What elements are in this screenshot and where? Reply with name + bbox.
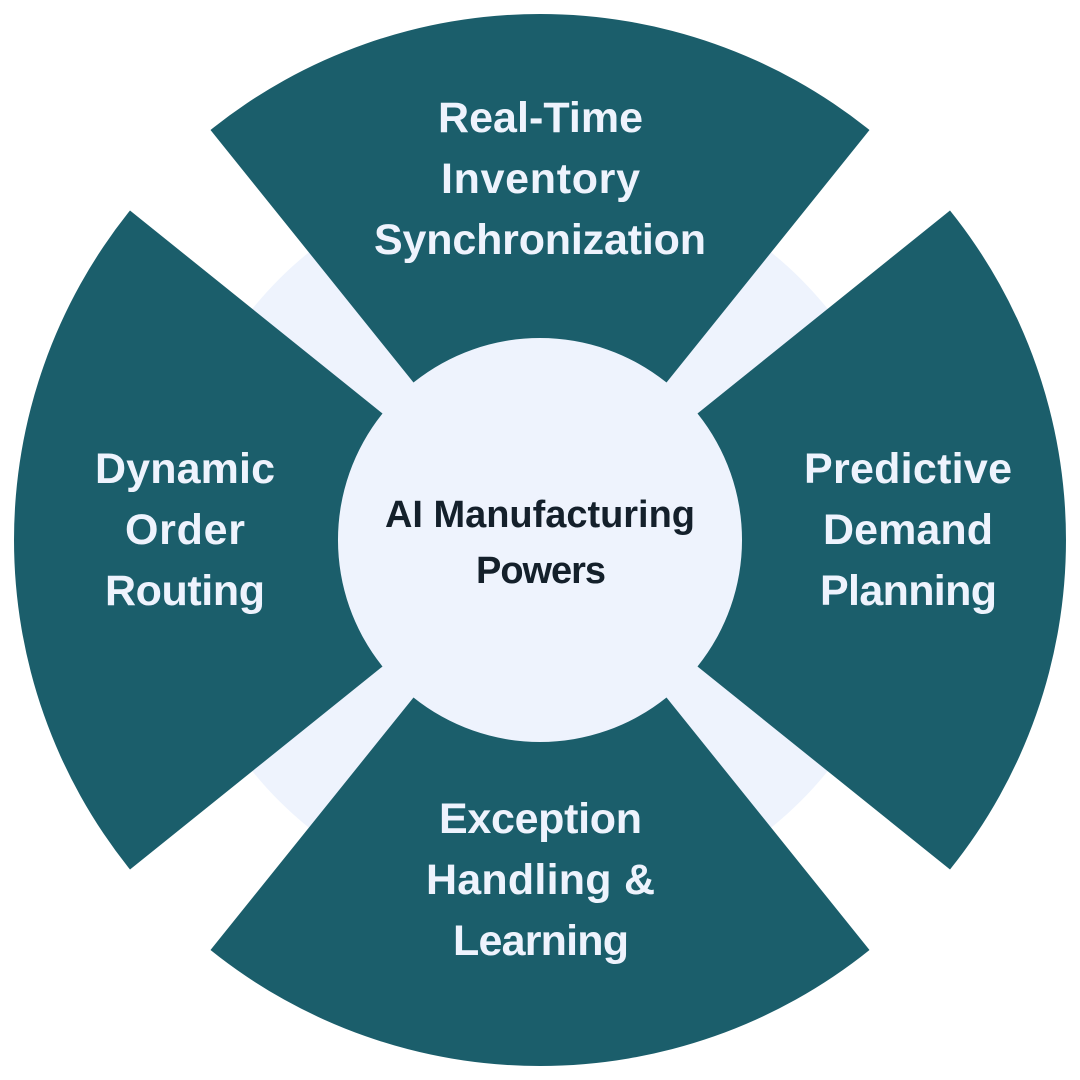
panel: exception handling and learning: Exception (439, 795, 642, 843)
panel: predictive demand planning (698, 210, 1066, 870)
panel: dynamic order routing: Order (125, 506, 245, 554)
panel: real-time inventory synchronization: Synchronization (374, 216, 706, 264)
panel: real-time inventory synchronization: Real-Time (438, 94, 643, 142)
panel: predictive demand planning: Predictive (804, 445, 1012, 493)
center title: Powers (476, 550, 606, 592)
panel: dynamic order routing: Routing (105, 567, 265, 615)
panel: exception handling and learning: Handling & (426, 856, 655, 904)
panel: predictive demand planning: Planning (820, 567, 997, 615)
panel: exception handling and learning: Learning (453, 917, 629, 965)
panel: real-time inventory synchronization (210, 14, 870, 383)
panel: predictive demand planning: Demand (823, 506, 993, 554)
center title: AI Manufacturing (385, 494, 695, 536)
panel: real-time inventory synchronization: Inventory (441, 155, 640, 203)
backdrop circle (171, 171, 909, 909)
panel: dynamic order routing (14, 210, 382, 870)
center title (385, 494, 695, 592)
panel: exception handling and learning (210, 698, 870, 1066)
panel: dynamic order routing: Dynamic (95, 445, 275, 493)
